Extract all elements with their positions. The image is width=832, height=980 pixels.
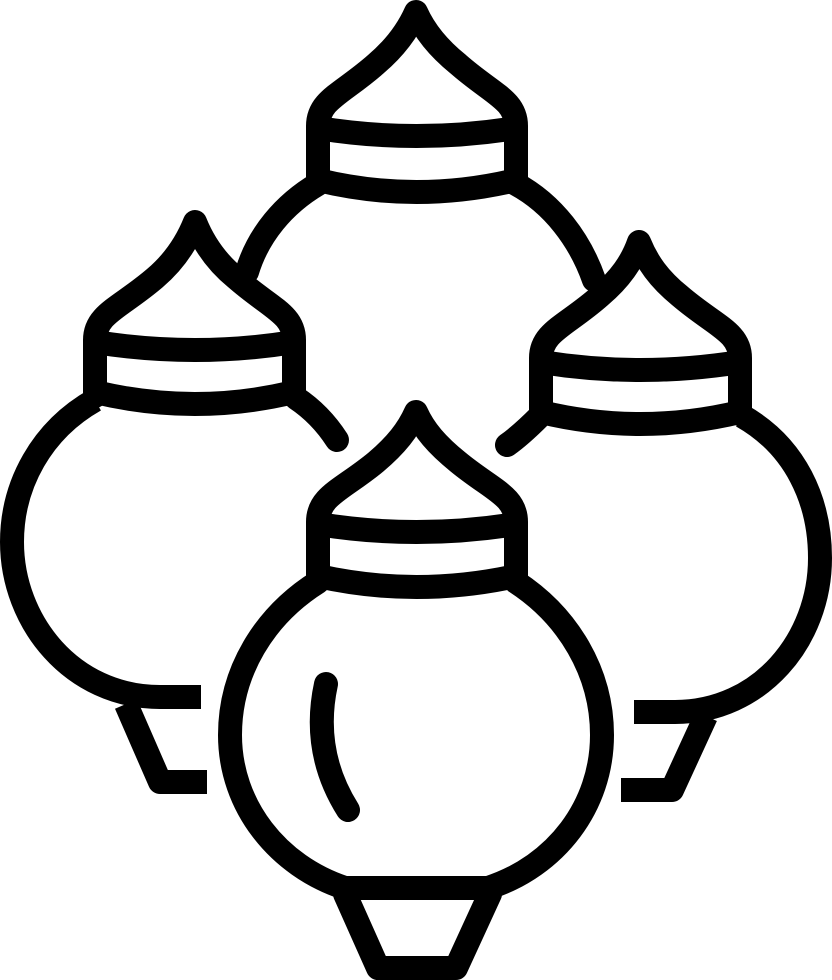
body left arc — [507, 416, 540, 445]
band top — [318, 128, 516, 136]
lantern: top back — [247, 12, 594, 280]
body right arc — [516, 184, 594, 280]
band bottom — [318, 576, 516, 587]
band bottom — [95, 392, 294, 404]
body — [12, 400, 201, 697]
lantern: left — [12, 222, 337, 782]
cap outline — [318, 412, 516, 580]
band bottom — [541, 412, 740, 424]
cap outline — [541, 242, 740, 414]
highlight — [322, 684, 348, 810]
cap outline — [318, 12, 516, 182]
body — [634, 416, 820, 712]
cap outline — [95, 222, 294, 396]
band top — [541, 362, 740, 370]
band top — [95, 342, 294, 350]
tassel — [621, 716, 706, 790]
body — [230, 582, 602, 888]
tassel — [126, 704, 207, 782]
band bottom — [318, 180, 516, 192]
band top — [318, 524, 516, 532]
body right arc — [296, 398, 337, 440]
lantern: front — [230, 412, 602, 968]
tassel — [345, 894, 490, 968]
body left arc — [247, 184, 318, 272]
lantern: right — [507, 242, 820, 790]
